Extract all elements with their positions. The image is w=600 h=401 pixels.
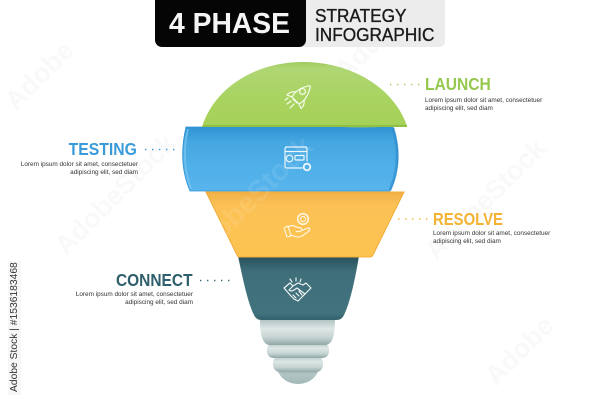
- watermark: background stock marks: AdobeStock: [49, 128, 182, 261]
- segment: resolve (yellow): [206, 192, 404, 257]
- subtitle text: INFOGRAPHIC: [314, 24, 434, 44]
- label: resolve text: Lorem ipsum dolor sit amet, consectetuer: [433, 230, 550, 237]
- connector: connect dots: [200, 280, 230, 282]
- watermark: background stock marks: Adobe: [329, 5, 410, 86]
- icon: rocket: [285, 86, 310, 108]
- header: black title block: [155, 0, 306, 47]
- subtitle text: [314, 4, 434, 44]
- stock id text: Adobe Stock | #1536183468: [9, 262, 20, 392]
- segment: connect (teal): [238, 256, 359, 320]
- label: connect text: Lorem ipsum dolor sit amet, consectetuer: [76, 291, 193, 298]
- label: launch text: adipiscing elit, sed diam: [425, 105, 493, 112]
- title text: 4 PHASE: [169, 8, 290, 40]
- icon: browser with gear: [285, 147, 310, 170]
- base: screw rings: [260, 320, 335, 372]
- connector: testing dots: [145, 148, 175, 150]
- label: resolve text: adipiscing elit, sed diam: [433, 238, 501, 245]
- watermark: over bulb: AdobeStock: [177, 130, 320, 273]
- segment: testing (blue): [183, 127, 398, 191]
- subtitle text: STRATEGY: [314, 4, 406, 26]
- header: grey subtitle block: [296, 0, 445, 47]
- base: screw dome: [277, 368, 319, 384]
- label: launch heading: LAUNCH: [425, 74, 491, 94]
- segment: launch (green): [202, 62, 407, 127]
- icon: handshake: [284, 278, 311, 301]
- icon: hand with gear: [284, 214, 310, 237]
- label: resolve text: [433, 230, 550, 245]
- label: testing text: Lorem ipsum dolor sit amet, consectetuer: [21, 161, 138, 168]
- label: launch text: Lorem ipsum dolor sit amet, consectetuer: [425, 97, 542, 104]
- label: launch text: [425, 97, 542, 112]
- label: connect text: [76, 291, 193, 306]
- label: testing heading: TESTING: [69, 138, 137, 158]
- label: connect heading: CONNECT: [116, 270, 193, 290]
- watermark: background stock marks: AdobeStock: [419, 133, 552, 266]
- label: testing text: [21, 161, 138, 176]
- connector: resolve dots: [398, 218, 428, 220]
- watermark: background stock marks: Adobe: [0, 35, 80, 116]
- label: connect text: adipiscing elit, sed diam: [125, 299, 193, 306]
- stock id strip: [8, 261, 21, 395]
- connector: launch dots: [390, 84, 420, 86]
- watermark: background stock marks: Adobe: [479, 310, 560, 391]
- label: testing text: adipiscing elit, sed diam: [70, 169, 138, 176]
- label: resolve heading: RESOLVE: [433, 208, 503, 228]
